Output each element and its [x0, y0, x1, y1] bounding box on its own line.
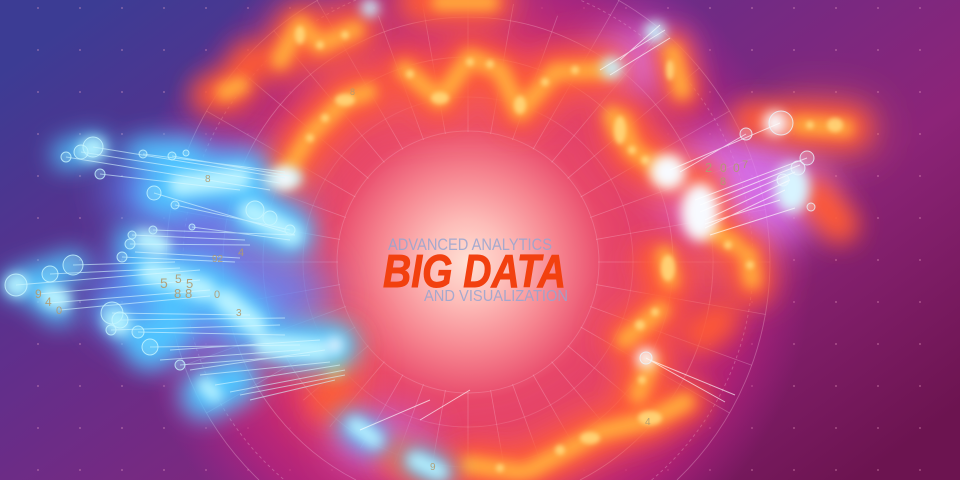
yellow hot spots: [295, 26, 843, 472]
scattered data digits: 92: [212, 254, 224, 265]
heading: advanced analytics: ADVANCED ANALYTICS: [388, 236, 552, 254]
scattered data digits: [35, 87, 748, 473]
scattered data digits: 9: [35, 287, 42, 301]
wide pink-orange ring haze: [295, 0, 850, 470]
data lines right: [360, 25, 807, 430]
subheading: and visualization: AND VISUALIZATION: [424, 288, 568, 305]
orange data ring core: [225, 2, 845, 472]
orange data ring glow: [210, 0, 850, 475]
left blue glow: [16, 147, 440, 472]
scattered data digits: 8: [185, 286, 192, 301]
scattered data digits: 5: [186, 276, 193, 291]
left blue clusters: [16, 148, 440, 472]
scattered data digits: 5: [175, 272, 182, 286]
scattered data digits: 0: [214, 289, 220, 301]
scattered data digits: 4: [238, 247, 244, 259]
scattered data digits: 4: [645, 417, 651, 428]
scattered data digits: 3: [236, 308, 242, 319]
scattered data digits: 9: [430, 462, 436, 473]
node circles left: [5, 137, 295, 370]
scattered data digits: 8: [174, 286, 181, 301]
scattered data digits: 2: [705, 160, 712, 175]
title: big data: BIG DATA: [383, 245, 566, 297]
scattered data digits: 0: [56, 305, 62, 317]
scattered data digits: 5: [160, 275, 168, 291]
data lines left: [16, 147, 345, 400]
radial grid rings and spokes: [166, 0, 770, 480]
scattered data digits: 4: [45, 295, 52, 309]
right white-blue bursts: [274, 0, 810, 368]
node circles right: [640, 111, 815, 364]
scattered data digits: 8: [205, 174, 211, 185]
wide halos: [90, 28, 830, 468]
scattered data digits: 8: [350, 87, 355, 97]
scattered data digits: 8: [720, 176, 726, 188]
scattered data digits: 7: [742, 159, 748, 171]
scattered data digits: 0: [733, 161, 740, 175]
scattered data digits: 0: [720, 161, 727, 175]
